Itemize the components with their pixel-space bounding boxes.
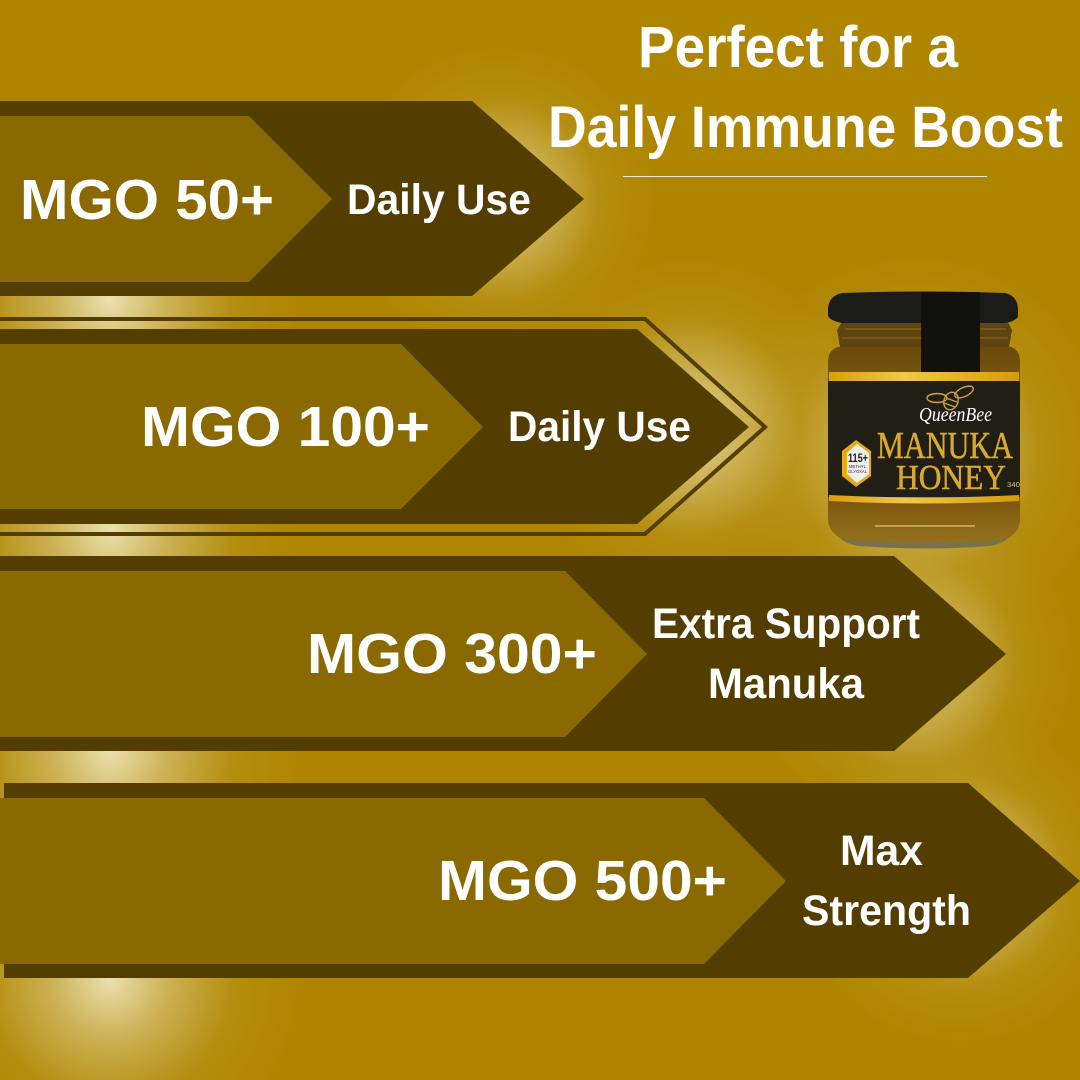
arrow: MGO 500+: MGO 500+ bbox=[438, 849, 727, 913]
jar glass base bbox=[835, 530, 1013, 548]
jar lid bbox=[828, 292, 1018, 323]
product name bbox=[877, 425, 1020, 497]
arrow: MGO 500+: Max bbox=[840, 827, 923, 875]
brand name: QueenBee bbox=[919, 404, 992, 426]
hexagon badge: GLYOXAL bbox=[848, 469, 867, 474]
arrow: MGO 50+: MGO 50+ bbox=[20, 168, 274, 232]
product name: MANUKA bbox=[877, 425, 1013, 467]
label bbox=[828, 381, 1020, 497]
hexagon badge bbox=[842, 440, 871, 487]
jar highlight bbox=[875, 525, 975, 527]
hexagon badge: 115+ bbox=[848, 451, 868, 465]
neck thread highlights bbox=[842, 329, 1008, 338]
lower gold band bbox=[829, 495, 1019, 504]
jar neck bbox=[837, 322, 1012, 347]
arrow: MGO 500+: Strength bbox=[802, 887, 971, 935]
arrow: MGO 50+: Daily Use bbox=[347, 176, 531, 224]
title underline bbox=[623, 176, 987, 177]
arrow: MGO 300+: Extra Support bbox=[652, 600, 920, 648]
arrow: MGO 100+: Daily Use bbox=[508, 403, 691, 451]
title: Perfect for a bbox=[638, 15, 959, 80]
product name: HONEY bbox=[896, 458, 1006, 497]
bee logo bbox=[927, 384, 975, 412]
arrow: MGO 300+: Manuka bbox=[708, 660, 865, 708]
arrow: MGO 50+ bbox=[0, 101, 584, 296]
arrow: MGO 300+: MGO 300+ bbox=[307, 622, 597, 686]
hexagon badge: METHYL bbox=[849, 464, 866, 469]
icon: manuka honey jar bbox=[828, 292, 1020, 548]
tamper seal bbox=[921, 292, 980, 373]
arrow: MGO 100+ bbox=[0, 319, 765, 534]
arrow: MGO 100+: MGO 100+ bbox=[141, 395, 430, 459]
title bbox=[548, 15, 1063, 160]
jar body bbox=[828, 347, 1020, 542]
arrow: MGO 500+ bbox=[0, 783, 1080, 978]
product name: 340 bbox=[1007, 482, 1020, 489]
upper gold band bbox=[829, 372, 1019, 381]
arrow: MGO 300+ bbox=[0, 556, 1006, 751]
